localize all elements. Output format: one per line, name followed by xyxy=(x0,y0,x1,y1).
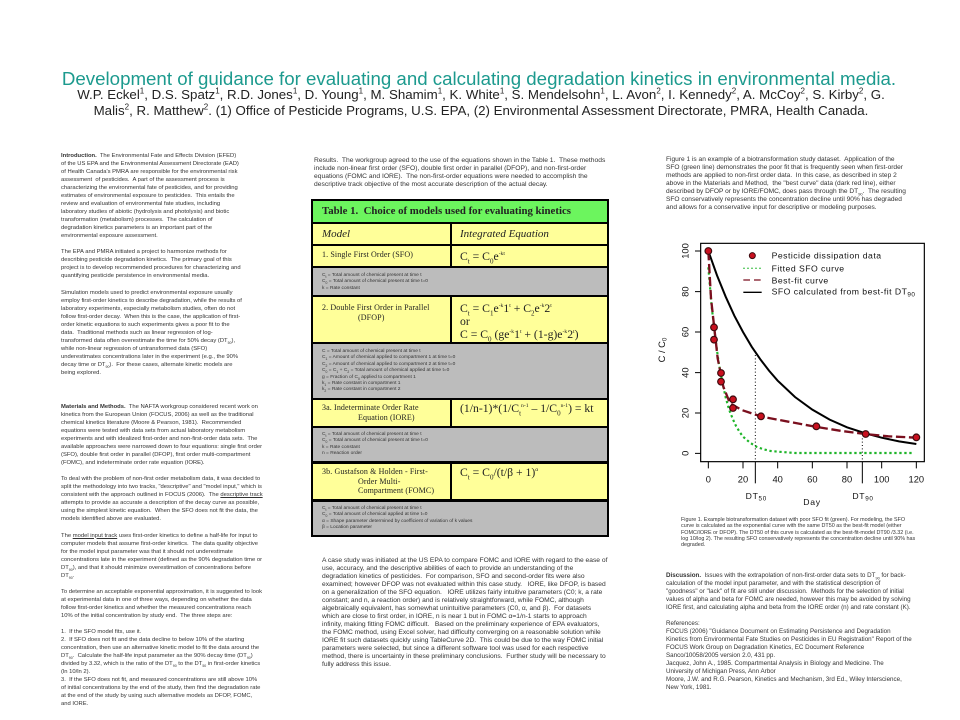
authors and affiliations xyxy=(77,87,885,118)
x axis tick labels: 40 xyxy=(772,475,783,485)
text block: discussion and references: "goodness" or "lack" of fit are still under discussion. Methods for the selection of initial xyxy=(666,588,904,595)
text block: materials and methods xyxy=(61,404,263,707)
SFO definitions xyxy=(313,268,607,295)
text block: discussion and references: calculation of the model input parameter, and with the statistical description of xyxy=(666,580,880,587)
y axis tick labels: 20 xyxy=(680,408,690,418)
text block: introduction: environmental exposure assessment. xyxy=(61,233,158,239)
DFOP definitions xyxy=(313,344,607,398)
text block: case study: which are close to first order, in IORE, n is near 1 but in FOMC α=1/n-1 starts to approach xyxy=(322,613,587,620)
DT50 marker: DT xyxy=(746,491,759,501)
DT90 marker: DT xyxy=(852,491,865,501)
text block: case study: algebraically equivalent, has somewhat unintuitive parameters (C0, α, and β). For datasets xyxy=(322,605,591,612)
text block: introduction: Simulation models used to predict environmental exposure usually xyxy=(61,290,233,296)
row: DFOP equation: or xyxy=(460,315,470,328)
text block: materials and methods: 10% of the initial concentration by study end. The three steps are: xyxy=(61,613,232,619)
text block: case study: IORE fit such datasets quickly using TableCurve 2D. This could be due to the way FOMC initial xyxy=(322,637,603,644)
DT50 marker xyxy=(746,355,767,503)
DFOP definitions: C2 = Amount of chemical applied to compartment 2 at time t=0 xyxy=(322,362,455,368)
column header: integrated equation: Integrated Equation xyxy=(460,228,549,240)
x axis title: Day xyxy=(803,497,821,507)
FOMC definitions: C0 = Total amount of chemical applied at time t=0 xyxy=(322,512,427,518)
SFO definitions: k = Rate constant xyxy=(322,286,360,291)
text block: case study: examined; however DFOP was not evaluated within this case study. IORE, like DFOP, is based xyxy=(322,581,606,588)
SFO calculated curve xyxy=(708,251,916,444)
text block: materials and methods: Materials and Methods. The NAFTA workgroup considered recent work on xyxy=(61,404,258,410)
text block: introduction: while non-linear regression of untransformed data (SFO) xyxy=(61,346,207,352)
text block: results: Results. The workgroup agreed to the use of the equations shown in the Table 1. These methods xyxy=(314,157,605,164)
row: FOMC label: Order Multi- xyxy=(358,477,401,486)
text block: case study: fully address this issue. xyxy=(322,661,391,668)
x axis tick labels: 80 xyxy=(842,475,852,485)
row: DFOP label: (DFOP) xyxy=(358,313,385,322)
legend: Pesticide dissipation data xyxy=(772,251,881,261)
text block: materials and methods: The model input track uses first-order kinetics to define a half-life for input to xyxy=(61,532,258,538)
DFOP definitions: k2 = Rate constant in compartment 2 xyxy=(322,387,400,393)
text block: introduction: degradation kinetics parameters is an important part of the xyxy=(61,225,212,231)
y axis tick labels: 80 xyxy=(680,286,690,297)
text block: figure description: and allows for a conservative input for descriptive or modeling purposes. xyxy=(666,204,877,211)
SFO definitions: C0 = Total amount of chemical present at time t=0 xyxy=(322,279,428,285)
text block: materials and methods: divided by 3.32, which is the ratio of the DT90 to the DT50 in first-order kinetics xyxy=(61,661,260,668)
FOMC definitions xyxy=(313,502,607,535)
text block: materials and methods: concentrations late in the experiment (defined as the 90% degradation time or xyxy=(61,557,262,563)
text block: introduction: Introduction. The Environmental Fate and Effects Division (EFED) xyxy=(61,153,236,159)
authors and affiliations: Malis2, R. Matthew2. (1) Office of Pesticide Programs, U.S. EPA, (2) Environmental Assessment Directorate, PMRA, Health Canada. xyxy=(94,103,868,118)
text block: figure description xyxy=(666,156,906,211)
figure caption: Figure 1. Example biotransformation dataset with poor SFO fit (green). For modeling, the SFO xyxy=(681,517,905,523)
row: IORE label: Equation (IORE) xyxy=(358,413,415,422)
text block: discussion and references: Sanco/10058/2005 version 2.0, 431 pp. xyxy=(666,652,775,659)
IORE definitions: Ct = Total amount of chemical present at time t xyxy=(322,432,422,438)
text block: case study xyxy=(322,557,608,668)
text block: discussion and references: Kinetics from Environmental Fate Studies on Pesticides in EU Registration" Report of the xyxy=(666,636,912,643)
text block: discussion and references: FOCUS Work Group on Degradation Kinetics, EC Document Reference xyxy=(666,644,864,651)
figure caption: FOMC/IORE or DFOP). The DT50 of this curve is calculated as the best-fit-model DT90 /3.32 (i.e. xyxy=(681,530,914,536)
x axis tick labels xyxy=(706,475,924,485)
text block: introduction: quantifying pesticide persistence in environmental media. xyxy=(61,273,209,279)
text block: figure description: SFO (green line) demonstrates the poor fit that is frequently seen when first-order xyxy=(666,164,903,171)
row: FOMC equation xyxy=(452,464,607,499)
IORE definitions: C0 = Total amount of chemical present at time t=0 xyxy=(322,438,428,444)
text block: materials and methods: equations were tested with data sets from actual laboratory metabolism xyxy=(61,428,245,434)
text block: introduction: employ first-order kinetics to describe degradation, while the results of xyxy=(61,298,242,304)
text block: introduction: data. Traditional methods such as linear regression of log- xyxy=(61,330,213,336)
text block: discussion and references: Discussion. Issues with the extrapolation of non-first-order data sets to DT90 for back- xyxy=(666,572,906,580)
row: IORE label xyxy=(313,400,450,426)
legend: SFO calculated from best-fit DT xyxy=(772,287,907,297)
row: SFO equation xyxy=(452,246,607,266)
text block: introduction: of Health Canada's PMRA are responsible for the environmental risk xyxy=(61,169,238,175)
text block: materials and methods: kinetics from the European Union (FOCUS, 2006) as well as the traditional xyxy=(61,412,254,418)
text block: introduction: underestimates concentrations later in the experiment (e.g., the 90% xyxy=(61,354,238,360)
text block: materials and methods: concentration, then use an alternative kinetic model to fit the data around the xyxy=(61,645,259,651)
column header: model xyxy=(313,224,450,244)
text block: materials and methods: follow first-order kinetics and whether the measured concentrations reach xyxy=(61,605,251,611)
text block: introduction: The EPA and PMRA initiated a project to harmonize methods for xyxy=(61,249,227,255)
text block: introduction: assessment of pesticides. A part of the assessment process is xyxy=(61,177,225,183)
text block: case study: degradation kinetics of pesticides. For comparison, SFO and second-order fits were also xyxy=(322,573,585,580)
fitted SFO curve xyxy=(708,267,913,453)
text block: figure description: methods are applied to non-first order data. In this case, as described in step 2 xyxy=(666,172,897,179)
text block: materials and methods: at experimental data in one of three ways, depending on whether the data xyxy=(61,597,252,603)
row: FOMC label: Compartment (FOMC) xyxy=(358,486,434,495)
DFOP definitions: C = Total amount of chemical present at time t xyxy=(322,349,421,354)
y axis tick labels: 0 xyxy=(680,451,690,456)
best-fit curve xyxy=(708,251,916,438)
text block: discussion and references: Jacquez, John A., 1985. Compartmental Analysis in Biology and Medicine. The xyxy=(666,660,884,667)
authors and affiliations: W.P. Eckel1, D.S. Spatz1, R.D. Jones1, D. Young1, M. Shamim1, K. White1, S. Mendelsohn1, L. Avon2, I. Kennedy2, A. McCoy2, S. Kirby2, G. xyxy=(77,87,885,102)
text block: figure description: above in the Materials and Method, the "best curve" data (dark red line), either xyxy=(666,180,896,187)
DT90 marker xyxy=(852,438,874,503)
text block: discussion and references: University of Michigan Press, Ann Arbor xyxy=(666,668,776,675)
text block: materials and methods: (ln 10/ln 2). xyxy=(61,669,90,675)
text block: materials and methods: (SFO), double first order in parallel (DFOP), first order multi-compartment xyxy=(61,452,250,458)
x axis tick labels: 120 xyxy=(909,475,924,485)
text block: discussion and references xyxy=(666,572,912,691)
text block: materials and methods: split the methodology into two tracks, "descriptive" and "model input," which is xyxy=(61,484,262,490)
text block: discussion and references: Moore, J.W. and R.G. Pearson, Kinetics and Mechanism, 3rd Ed., Wiley Interscience, xyxy=(666,676,902,683)
text block: case study: constant; and n, a reaction order) and is relatively straightforward, while FOMC, although xyxy=(322,597,584,604)
text block: materials and methods: DT90. xyxy=(61,573,74,580)
text block: case study: use, accuracy, and the descriptive abilities of each to provide an understanding of the xyxy=(322,565,573,572)
text block: case study: infinity, making fitting FOMC difficult. Based on the preliminary experience of EPA evaluators, xyxy=(322,621,599,628)
text block: materials and methods: computer models that assume first-order kinetics. The data quality objective xyxy=(61,541,258,547)
legend xyxy=(743,251,915,298)
row: DFOP label xyxy=(313,297,450,342)
DFOP definitions: k1 = Rate constant in compartment 1 xyxy=(322,381,400,387)
y axis tick labels: 40 xyxy=(680,367,690,378)
text block: introduction: review and evaluation of environmental fate studies, including xyxy=(61,201,220,207)
column header: model: Model xyxy=(322,228,350,240)
text block: results: descriptive track objective of the most accurate description of the actual decay. xyxy=(314,181,548,188)
text block: introduction: describing pesticide degradation kinetics. The primary goal of this xyxy=(61,257,232,263)
y axis tick labels: 100 xyxy=(680,243,690,259)
row: IORE label: 3a. Indeterminate Order Rate xyxy=(322,403,419,412)
x axis tick labels: 100 xyxy=(874,475,889,485)
text block: discussion and references: References: xyxy=(666,620,700,627)
text block: case study: A case study was initiated at the US EPA to compare FOMC and IORE with regard to the ease of xyxy=(322,557,607,564)
IORE definitions: k = Rate constant xyxy=(322,445,360,450)
data points xyxy=(705,248,920,441)
title: Development of guidance for evaluating and calculating degradation kinetics in environmental media. xyxy=(62,68,896,89)
text block: materials and methods: available approaches were narrowed down to four equations: single first order xyxy=(61,444,262,450)
text block: results xyxy=(314,157,606,188)
figure caption: curve is calculated as the exponential curve with the same DT50 as the best-fit model (either xyxy=(681,523,902,529)
text block: discussion and references: values of alpha and beta for FOMC are needed, however this may be avoided by solving xyxy=(666,596,911,603)
text block: materials and methods: DT90. Calculate the half-life input parameter as the 90% decay time (DT90) xyxy=(61,653,253,660)
text block: figure description: SFO conservatively represents the concentration decline until 90% has degraded xyxy=(666,196,902,203)
x axis tick labels: 60 xyxy=(807,475,818,485)
SFO definitions: Ct = Total amount of chemical present at time t xyxy=(322,273,422,279)
text block: case study: parameters were selected, but since a different software tool was used for each respective xyxy=(322,645,589,652)
text block: figure description: Figure 1 is an example of a biotransformation study dataset. Application of the xyxy=(666,156,895,163)
table title: Table 1. Choice of models used for evaluating kinetics xyxy=(322,205,571,217)
text block: materials and methods: consistent with the approach outlined in FOCUS (2006). The descriptive track xyxy=(61,492,263,498)
row: SFO label xyxy=(313,246,450,266)
text block: introduction: being explored. xyxy=(61,370,101,376)
FOMC definitions: Ct = Total amount of chemical present at time t xyxy=(322,506,422,512)
y axis title: C / C xyxy=(657,341,667,362)
figure caption xyxy=(681,517,915,548)
text block: introduction: decay time or DT90). For these cases, alternate kinetic models are xyxy=(61,362,233,369)
chart: pesticide dissipation curves xyxy=(657,242,925,507)
row: IORE equation xyxy=(452,400,607,426)
legend: Best-fit curve xyxy=(772,275,829,285)
text block: case study: on a generalization of the SFO equation. IORE utilizes fairly intuitive parameters (C0; k, a rate xyxy=(322,589,602,596)
text block: materials and methods: DT90), and that it should minimize overestimation of concentrations before xyxy=(61,565,251,572)
text block: introduction: follow first-order decay. When this is the case, the application of first- xyxy=(61,314,240,320)
row: SFO label: 1. Single First Order (SFO) xyxy=(322,250,413,259)
text block: materials and methods: at the end of the study by using such alternative models as DFOP, FOMC, xyxy=(61,693,252,699)
text block: results: include non-linear first order (SFO), double first order in parallel (DFOP), and non-first-order xyxy=(314,165,586,172)
row: DFOP equation: C = C0 (ge-k1t + (1-g)e-k2t) xyxy=(460,328,578,343)
text block: introduction: transformed data often overestimate the time for 50% decay (DT50), xyxy=(61,338,235,345)
text block: case study: method, there is uncertainty in these preliminary conclusions. Further study will be necessary to xyxy=(322,653,606,660)
row: FOMC label xyxy=(313,464,450,499)
x axis tick labels: 20 xyxy=(738,475,748,485)
text block: discussion and references: FOCUS (2006) "Guidance Document on Estimating Persistence and Degradation xyxy=(666,628,891,635)
text block: case study: the FOMC method, using Excel solver, had difficulty converging on a reasonable solution while xyxy=(322,629,601,636)
text block: discussion and references: IORE first, and calculating alpha and beta from the IORE order (n) and rate constant (K). xyxy=(666,604,911,611)
text block: discussion and references: New York, 1981. xyxy=(666,684,712,691)
row: FOMC label: 3b. Gustafson & Holden - First- xyxy=(322,467,428,476)
FOMC definitions: α = Shape parameter determined by coefficient of variation of k values xyxy=(322,519,472,524)
legend: Fitted SFO curve xyxy=(772,264,845,274)
row: DFOP label: 2. Double First Order in Parallel xyxy=(322,303,430,312)
text block: introduction: project is to develop recommended procedures for characterizing and xyxy=(61,265,241,271)
x axis tick labels: 0 xyxy=(706,475,711,485)
text block: introduction: laboratory experiments, especially metabolism studies, often do not xyxy=(61,306,235,312)
text block: materials and methods: for the model input parameter was that it should not underestimate xyxy=(61,549,233,555)
text block: materials and methods: and IORE. xyxy=(61,701,88,707)
text block: introduction: order kinetic equations to such experiments gives a poor fit to the xyxy=(61,322,230,328)
text block: materials and methods: attempts to provide as accurate a description of the decay curve as possible, xyxy=(61,500,259,506)
DFOP definitions: C1 = Amount of chemical applied to compartment 1 at time t=0 xyxy=(322,355,455,361)
row: FOMC equation: Ct = C0/(t/β + 1)α xyxy=(460,466,538,481)
FOMC definitions: β = Location parameter xyxy=(322,525,372,530)
text block: materials and methods: models identified above are evaluated. xyxy=(61,516,161,522)
text block: introduction: laboratory studies of abiotic (hydrolysis and photolysis) and biotic xyxy=(61,209,229,215)
DT50 marker: 50 xyxy=(759,496,767,503)
DFOP definitions: g = Fraction of C0 applied to compartment 1 xyxy=(322,375,416,381)
DFOP definitions: C0 = C1 + C2 = Total amount of chemical applied at time t=0 xyxy=(322,368,449,374)
y axis title: 0 xyxy=(662,337,669,341)
text block: introduction: of the US EPA and the Environmental Assessment Directorate (EAD) xyxy=(61,161,239,167)
y axis tick labels xyxy=(680,243,690,456)
text block: introduction: estimates of environmental exposure to pesticides. This entails the xyxy=(61,193,235,199)
IORE definitions xyxy=(313,428,607,461)
text block: materials and methods: To deal with the problem of non-first order metabolism data, it was decided to xyxy=(61,476,260,482)
text block: materials and methods: 2. If SFO does not fit and the data decline to below 10% of the starting xyxy=(61,637,244,643)
text block: materials and methods: To determine an acceptable exponential approximation, it is suggested to look xyxy=(61,589,262,595)
table: choice of models xyxy=(311,199,609,537)
DT90 marker: 90 xyxy=(865,496,874,503)
figure caption: degraded. xyxy=(681,542,705,548)
text block: materials and methods: chemical kinetics literature (Moore & Pearson, 1981). Recommended xyxy=(61,420,241,426)
text block: introduction xyxy=(61,153,242,376)
legend: 90 xyxy=(907,291,915,298)
text block: materials and methods: 3. If the SFO does not fit, and measured concentrations are still above 10% xyxy=(61,677,257,683)
text block: materials and methods: using the simplest kinetic equation. When the SFO does not fit the data, the xyxy=(61,508,258,514)
figure caption: log 10/log 2). The resulting SFO conservatively represents the concentration decline until 90% has xyxy=(681,536,915,542)
text block: materials and methods: 1. If the SFO model fits, use it. xyxy=(61,629,141,635)
row: DFOP equation: Ct = C1e-k1t + C2e-k2t xyxy=(460,302,552,317)
text block: figure description: described by DFOP or by IORE/FOMC, does pass through the DT90. The resulting xyxy=(666,188,906,196)
table title xyxy=(313,201,607,222)
row: IORE equation: (1/n-1)*(1/Ctn-1 – 1/C0n-1) = kt xyxy=(460,402,594,417)
y axis tick labels: 60 xyxy=(680,327,690,337)
text block: results: equations (FOMC and IORE). The non-first-order equations were needed to accomplish the xyxy=(314,173,588,180)
row: DFOP equation xyxy=(452,297,607,342)
text block: materials and methods: experiments and with idealized first-order and non-first-order data sets. The xyxy=(61,436,257,442)
row: SFO equation: Ct = C0e-kt xyxy=(460,250,505,265)
text block: materials and methods: (FOMC), and indeterminate order rate equation (IORE). xyxy=(61,460,205,466)
column header: integrated equation xyxy=(452,224,607,244)
text block: introduction: transformation (metabolism) processes. The calculation of xyxy=(61,217,213,223)
IORE definitions: n = Reaction order xyxy=(322,451,362,456)
text block: materials and methods: of initial concentrations by the end of the study, then find the degradation rate xyxy=(61,685,260,691)
text block: introduction: characterizing the environmental fate of pesticides, and for providing xyxy=(61,185,238,191)
